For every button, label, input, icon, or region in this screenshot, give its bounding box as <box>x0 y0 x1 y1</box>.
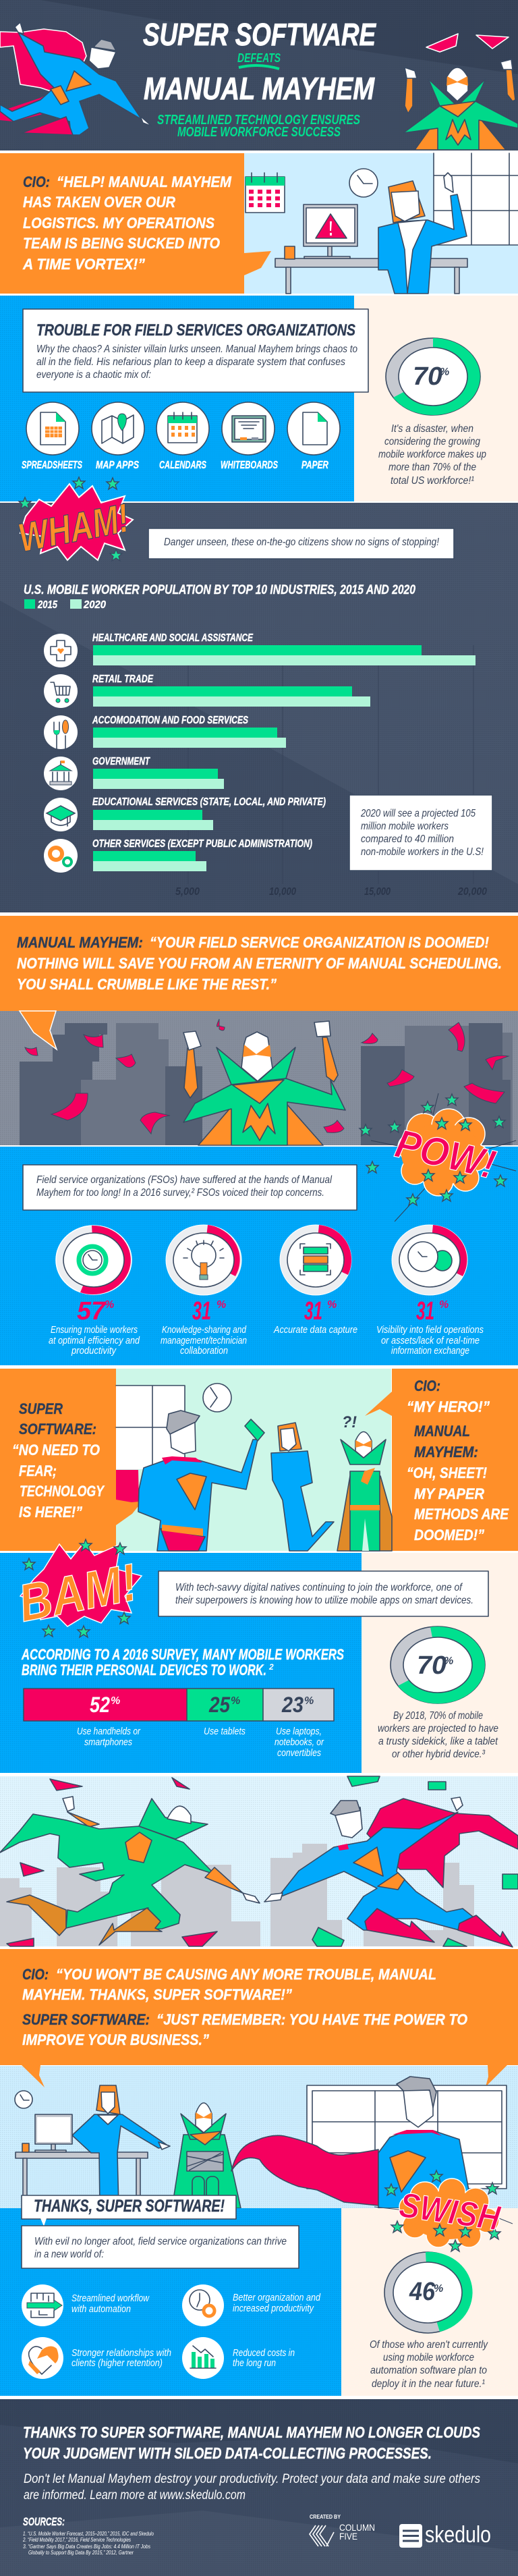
closing text <box>24 2472 480 2502</box>
value: 23 percent: % <box>304 1695 314 1707</box>
panel: mobile worker chart section <box>0 477 518 912</box>
bar: government: GOVERNMENT <box>92 756 150 767</box>
benefit: reduced costs: the long run <box>233 2357 276 2369</box>
callout: digital natives: With tech-savvy digital natives continuing to join the workforce, one of <box>175 1582 463 1593</box>
heading: survey: ACCORDING TO A 2016 SURVEY, MANY MOBILE WORKERS <box>21 1646 344 1663</box>
benefit: reduced costs <box>182 2337 295 2379</box>
confetti: paper scraps <box>25 1019 509 1134</box>
icon: gears <box>44 839 78 873</box>
donut caption: using mobile workforce <box>383 2352 474 2363</box>
legend <box>24 599 106 611</box>
callout: danger unseen: Danger unseen, these on-the-go citizens show no signs of stopping! <box>164 537 439 548</box>
value: 52 percent: % <box>111 1695 120 1707</box>
text box <box>23 309 368 392</box>
donut caption: automation software plan to <box>370 2365 487 2376</box>
legend: 2015 <box>37 599 58 611</box>
axis labels: 10,000 <box>269 886 296 898</box>
stat: 31 percent data capture: Accurate data capture <box>273 1324 357 1336</box>
logo: column five <box>310 2514 375 2546</box>
icon: paper: PAPER <box>301 460 328 471</box>
value: 25 percent: % <box>231 1695 240 1707</box>
bar: retail: RETAIL TRADE <box>92 674 154 685</box>
value: 25 percent: 25 <box>208 1693 231 1717</box>
quote text: CIO: <box>23 173 50 190</box>
text box: everyone is a chaotic mix of: <box>36 369 151 381</box>
icon: map apps <box>92 402 144 471</box>
benefit: relationships: Stronger relationships with <box>71 2347 171 2359</box>
character: CIO clapping <box>271 1423 334 1551</box>
benefit: relationships: clients (higher retention) <box>71 2357 163 2369</box>
donut caption: considering the growing <box>384 436 480 447</box>
donut caption: It's a disaster, when <box>391 423 473 435</box>
stat: 31 percent data capture <box>273 1225 357 1336</box>
text box: Why the chaos? A sinister villain lurks unseen. Manual Mayhem brings chaos to <box>36 344 357 355</box>
character: villain <box>183 1021 345 1145</box>
icon: whiteboards: WHITEBOARDS <box>221 460 278 471</box>
logo: skedulo <box>399 2522 491 2548</box>
callout: projected workers: compared to 40 million <box>361 833 454 845</box>
left quote text <box>12 1400 105 1520</box>
icon: spreadsheets <box>22 402 82 471</box>
text box: Field service organizations (FSOs) have suffered at the hands of Manual <box>36 1174 332 1186</box>
burst: bam: BAM! <box>13 1552 142 1633</box>
donut: 70 percent sidekick: 70 <box>417 1651 447 1680</box>
quote text: CIO: <box>22 1966 49 1983</box>
right quote text: CIO: <box>414 1377 440 1394</box>
burst: pow: POW! <box>391 1120 500 1187</box>
sources: 2. “Field Mobility 2017,” 2016, Field Service Technologies <box>22 2536 132 2543</box>
left quote text: FEAR; <box>19 1462 57 1479</box>
title: manual mayhem: MANUAL MAYHEM <box>144 71 375 106</box>
donut: 46 percent <box>384 2252 473 2333</box>
heading: survey: BRING THEIR PERSONAL DEVICES TO WORK. <box>22 1662 266 1678</box>
donut caption: workers are projected to have <box>378 1723 498 1734</box>
callout: projected workers: 2020 will see a projected 105 <box>360 808 476 819</box>
icon: clock <box>349 169 378 197</box>
speech tail left <box>116 1500 144 1525</box>
benefit: reduced costs: Reduced costs in <box>233 2347 295 2359</box>
benefit: productivity <box>182 2284 321 2326</box>
donut caption <box>378 1710 498 1760</box>
panel: villain illustration <box>0 1011 518 1145</box>
donut caption <box>370 2339 488 2390</box>
debris: planes and devices <box>7 1776 518 1946</box>
character: villain flying <box>0 1797 260 1945</box>
speech tails <box>22 2065 507 2087</box>
callout: digital natives <box>159 1571 488 1616</box>
value: 52 percent: 52 <box>90 1693 110 1717</box>
value: 23 percent: 23 <box>281 1693 304 1717</box>
donut caption: By 2018, 70% of mobile <box>393 1710 483 1722</box>
panel: CIO help quote <box>0 153 518 294</box>
bar captions <box>77 1726 324 1759</box>
benefit: productivity: increased productivity <box>233 2303 314 2314</box>
sources: 1. “U.S. Mobile Worker Forecast, 2015–2020,” 2015, IDC and Skedulo <box>23 2530 154 2537</box>
bar: healthcare <box>92 632 476 665</box>
stacked bar <box>24 1689 334 1721</box>
donut caption: or other hybrid device.³ <box>392 1749 486 1760</box>
quote text <box>17 934 502 993</box>
panel: trouble for field services <box>0 296 518 501</box>
bar: education: EDUCATIONAL SERVICES (STATE, LOCAL, AND PRIVATE) <box>92 796 326 808</box>
logo: column five: COLUMN <box>339 2522 375 2533</box>
closing headline <box>23 2423 481 2462</box>
bar: healthcare: HEALTHCARE AND SOCIAL ASSISTANCE <box>92 632 254 644</box>
axis labels: 5,000 <box>175 886 200 898</box>
stat: 57 percent efficiency: Ensuring mobile workers <box>51 1324 138 1336</box>
sources: 3. “Gartner Says Big Data Creates Big Jobs: 4.4 Million IT Jobs <box>23 2543 151 2550</box>
sources: Globally to Support Big Data By 2015,” 2012, Gartner <box>28 2549 134 2556</box>
computer and desk <box>16 2114 148 2208</box>
computer and desk <box>275 204 467 294</box>
icon: paper <box>287 402 340 471</box>
burst: wham <box>15 477 133 561</box>
chart title: U.S. MOBILE WORKER POPULATION BY TOP 10 INDUSTRIES, 2015 AND 2020 <box>24 583 415 597</box>
text box: Mayhem for too long! In a 2016 survey,² FSOs voiced their top concerns. <box>36 1187 324 1199</box>
stat: 31 percent visibility: Visibility into field operations <box>376 1324 484 1336</box>
donut: 46 percent: 46 <box>409 2278 436 2306</box>
right quote text: DOOMED!” <box>414 1527 484 1543</box>
quote text: TEAM IS BEING SUCKED INTO <box>23 235 220 252</box>
character: villain worried <box>337 1413 392 1551</box>
bar captions: Use tablets <box>204 1726 246 1737</box>
character: hero flying <box>264 1797 518 1947</box>
icon: clock <box>15 2091 32 2108</box>
bar captions: notebooks, or <box>275 1736 324 1748</box>
stat: 31 percent visibility: or assets/lack of real-time <box>381 1335 480 1346</box>
axis labels: 20,000 <box>457 886 487 898</box>
heading: survey: 2 <box>268 1662 274 1672</box>
text box <box>22 2226 299 2268</box>
quote text: YOU SHALL CRUMBLE LIKE THE REST.” <box>17 976 277 993</box>
donut caption: mobile workforce makes up <box>378 449 486 460</box>
donut caption: a trusty sidekick, like a tablet <box>378 1736 498 1747</box>
right quote text: “OH, SHEET! <box>407 1464 487 1481</box>
axis labels <box>175 886 487 898</box>
donut caption: deploy it in the near future.¹ <box>372 2378 485 2390</box>
callout: danger unseen <box>148 528 454 559</box>
heading: survey <box>21 1646 344 1678</box>
bar: accommodation: ACCOMODATION AND FOOD SERVICES <box>92 715 248 726</box>
icon: fork and spoon <box>44 715 78 749</box>
left quote text: TECHNOLOGY <box>20 1483 105 1500</box>
subtitle: STREAMLINED TECHNOLOGY ENSURES <box>157 113 361 128</box>
icon: government building <box>44 757 78 790</box>
window <box>116 1386 185 1469</box>
bar captions: convertibles <box>277 1747 321 1759</box>
character: hero with cape <box>231 2077 472 2208</box>
title: super software: SUPER SOFTWARE <box>143 17 376 52</box>
donut: 70 percent workforce: 70 <box>413 362 442 391</box>
stat: 31 percent knowledge sharing: Knowledge-sharing and <box>162 1324 247 1336</box>
paper planes <box>426 34 509 52</box>
sources: SOURCES: <box>23 2515 65 2528</box>
left quote text: IS HERE!” <box>19 1504 82 1520</box>
sources <box>22 2515 154 2556</box>
bar captions: Use handhelds or <box>77 1726 141 1737</box>
text box: With evil no longer afoot, field service organizations can thrive <box>34 2236 287 2247</box>
stat: 31 percent visibility <box>376 1225 484 1356</box>
panel: FSO concerns <box>0 1093 518 1365</box>
panel: mobile devices <box>0 1539 518 1773</box>
stat: 57 percent efficiency <box>49 1226 140 1356</box>
stat: 31 percent knowledge sharing <box>161 1225 247 1356</box>
bar captions: Use laptops, <box>276 1726 322 1737</box>
right quote text: MANUAL <box>414 1423 470 1440</box>
panel: office illustration <box>0 2065 518 2208</box>
bar: education <box>92 796 326 830</box>
subtitle: MOBILE WORKFORCE SUCCESS <box>177 125 341 140</box>
donut: 70 percent workforce <box>386 338 480 415</box>
panel: footer <box>0 2399 518 2576</box>
callout: projected workers: non-mobile workers in the U.S! <box>361 846 484 858</box>
quote text: MANUAL MAYHEM: <box>17 934 143 951</box>
character: villain tied up <box>172 2103 241 2208</box>
bar captions: smartphones <box>84 1736 132 1748</box>
icon: wall calendar <box>246 173 285 213</box>
text box: all in the field. His nefarious plan to keep a disparate system that confuses <box>36 356 345 368</box>
quote text: MAYHEM. THANKS, SUPER SOFTWARE!” <box>22 1986 292 2003</box>
stat: 31 percent knowledge sharing: collaboration <box>180 1345 228 1356</box>
bar: other services: OTHER SERVICES (EXCEPT PUBLIC ADMINISTRATION) <box>92 838 312 850</box>
panel: super software arrives <box>0 1369 518 1551</box>
panel: manual mayhem quote <box>0 916 518 1011</box>
right quote text: “MY HERO!” <box>407 1398 490 1415</box>
benefit: workflow: Streamlined workflow <box>71 2293 150 2304</box>
quote text: IMPROVE YOUR BUSINESS.” <box>22 2031 209 2048</box>
right quote text: MY PAPER <box>414 1485 484 1502</box>
speech tail <box>244 251 271 275</box>
donut caption: more than 70% of the <box>388 462 476 473</box>
stat: 31 percent knowledge sharing: management/technician <box>161 1335 247 1346</box>
text box: in a new world of: <box>34 2249 104 2260</box>
character: CIO pointing <box>73 2085 170 2208</box>
bar: government <box>92 756 224 789</box>
benefit: productivity: Better organization and <box>233 2292 321 2303</box>
stat: 31 percent data capture: 31 <box>304 1297 322 1325</box>
callout: projected workers <box>349 795 492 871</box>
callout: projected workers: million mobile workers <box>361 821 449 832</box>
text box: TROUBLE FOR FIELD SERVICES ORGANIZATIONS <box>36 321 355 339</box>
icon: graduation cap <box>44 798 78 831</box>
burst: wham: WHAM! <box>15 495 132 561</box>
quote text: HAS TAKEN OVER OUR <box>23 194 175 211</box>
bar: accommodation <box>92 715 286 748</box>
stat: 57 percent efficiency: 57 <box>77 1297 107 1325</box>
speech tail <box>20 1011 57 1049</box>
quote text: “YOU WON'T BE CAUSING ANY MORE TROUBLE, MANUAL <box>56 1966 436 1983</box>
icon: healthcare cross <box>44 634 78 667</box>
benefit: relationships <box>22 2337 171 2379</box>
quote text: LOGISTICS. MY OPERATIONS <box>23 215 214 231</box>
character: CIO on phone <box>378 173 467 294</box>
heading box <box>22 2195 236 2226</box>
icon: clock <box>203 1383 231 1412</box>
stat: 31 percent visibility: % <box>439 1299 449 1311</box>
text box <box>23 1165 357 1210</box>
panel: fight illustration <box>0 1776 518 1947</box>
icon: spreadsheets: SPREADSHEETS <box>22 460 82 471</box>
subtitle <box>157 113 361 140</box>
donut: 70 percent sidekick <box>391 1626 485 1703</box>
logo: skedulo: skedulo <box>425 2522 491 2548</box>
quote text <box>22 1966 467 2048</box>
icon: calendars <box>156 402 209 471</box>
speech tail right <box>365 1392 392 1416</box>
panel: thanks section <box>0 2170 518 2396</box>
burst: pow <box>359 1093 516 1222</box>
quote text: “JUST REMEMBER: YOU HAVE THE POWER TO <box>156 2011 467 2028</box>
left quote text: SUPER <box>19 1400 63 1417</box>
stat: 31 percent knowledge sharing: % <box>217 1299 226 1311</box>
donut: 70 percent workforce: % <box>440 366 449 378</box>
heading box: THANKS, SUPER SOFTWARE! <box>34 2197 225 2216</box>
bar chart <box>92 632 487 898</box>
closing headline: YOUR JUDGMENT WITH SILOED DATA-COLLECTING PROCESSES. <box>23 2444 432 2462</box>
panel: thanks quote <box>0 1949 518 2065</box>
stat: 57 percent efficiency: productivity <box>71 1345 117 1356</box>
closing text: are informed. Learn more at www.skedulo.com <box>24 2488 246 2502</box>
donut caption <box>378 423 486 487</box>
character: super software <box>116 1410 264 1551</box>
stat: 31 percent data capture: % <box>327 1299 337 1311</box>
legend: 2020 <box>83 599 106 611</box>
donut caption: total US workforce!¹ <box>391 475 474 487</box>
left quote text: “NO NEED TO <box>12 1442 100 1458</box>
benefit: workflow <box>22 2284 150 2326</box>
icon: map apps: MAP APPS <box>96 460 139 471</box>
window <box>307 2085 507 2189</box>
bar: other services <box>92 838 312 871</box>
header panel <box>0 0 518 150</box>
title: defeats <box>237 51 281 69</box>
illustration: villain arms raised <box>403 59 518 150</box>
burst: swish <box>374 2170 513 2251</box>
quote text: “YOUR FIELD SERVICE ORGANIZATION IS DOOMED! <box>150 934 489 951</box>
stat: 57 percent efficiency: at optimal efficiency and <box>49 1335 140 1346</box>
stat: 31 percent visibility: information exchange <box>391 1345 469 1356</box>
illustration: hero flying <box>0 22 152 135</box>
quote text <box>22 173 232 273</box>
stat: 57 percent efficiency: % <box>105 1299 114 1311</box>
stat: 31 percent visibility: 31 <box>416 1297 434 1325</box>
character: villain worried: ?! <box>342 1413 357 1431</box>
icon: whiteboards <box>221 402 278 471</box>
quote text: SUPER SOFTWARE: <box>22 2011 150 2028</box>
donut caption: Of those who aren't currently <box>370 2339 488 2351</box>
bar: retail <box>92 674 370 707</box>
left quote text: SOFTWARE: <box>19 1421 96 1437</box>
donut: 46 percent: % <box>434 2283 443 2295</box>
title: defeats: DEFEATS <box>237 51 281 65</box>
donut: 70 percent sidekick: % <box>444 1655 453 1667</box>
right quote text: MAYHEM: <box>414 1444 478 1460</box>
logo: column five: CREATED BY <box>310 2514 341 2520</box>
stat: 31 percent knowledge sharing: 31 <box>192 1297 211 1325</box>
benefit: workflow: with automation <box>71 2303 131 2315</box>
logo: column five: FIVE <box>339 2531 357 2542</box>
quote text: A TIME VORTEX!” <box>22 256 145 273</box>
axis labels: 15,000 <box>364 886 391 898</box>
icon: shopping cart <box>44 674 78 708</box>
quote text: “HELP! MANUAL MAYHEM <box>57 173 232 190</box>
right quote text <box>407 1377 509 1543</box>
burst: swish: SWISH <box>397 2185 503 2239</box>
icon: calendars: CALENDARS <box>159 460 206 471</box>
